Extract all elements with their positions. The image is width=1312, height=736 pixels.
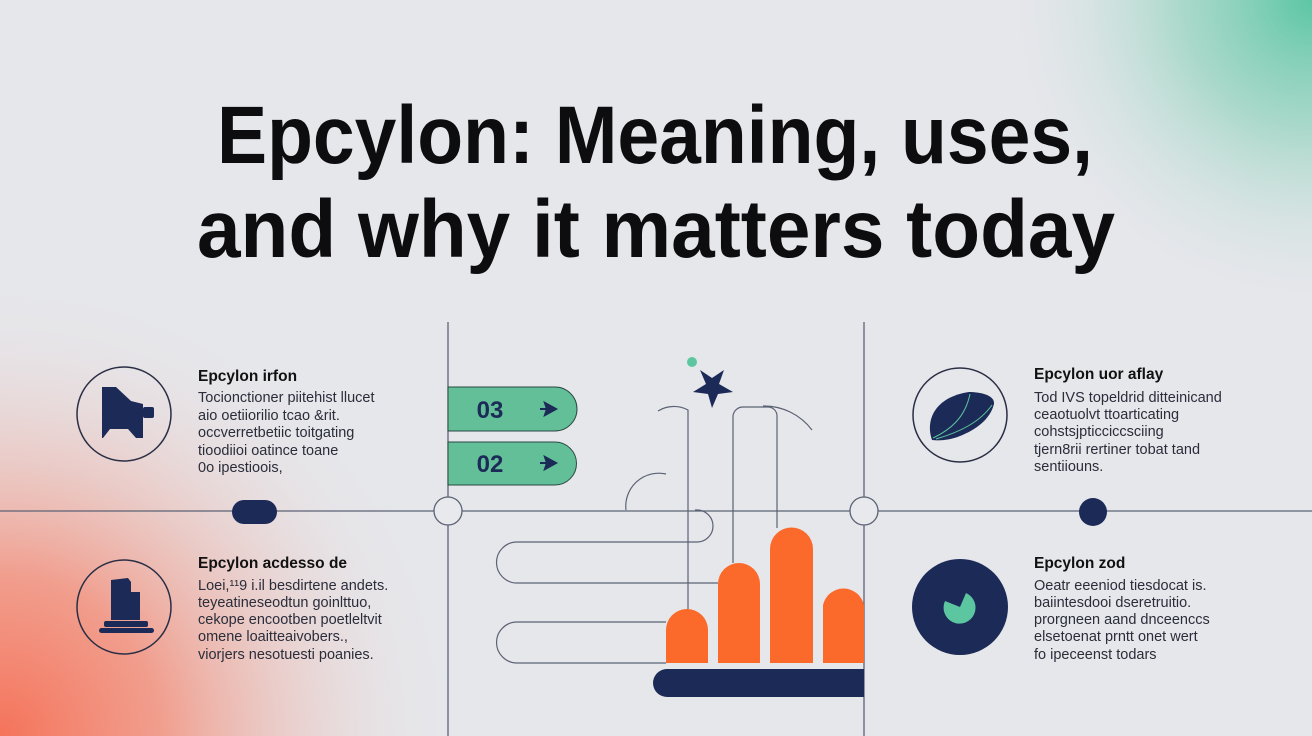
icon: star [687, 357, 733, 408]
text: top-left: aio oetiiorilio tcao &rit. [198, 408, 340, 424]
text: top-left: Tocionctioner piitehist llucet [198, 390, 375, 406]
text: bottom-right: elsetoenat prntt onet wert [1034, 629, 1198, 645]
icon: leaf [913, 368, 1007, 462]
text: bottom-right: baiintesdooi dseretruitio. [1034, 595, 1191, 611]
text: top-right: tjern8rii rertiner tobat tand [1034, 442, 1200, 458]
grid lines [0, 322, 1312, 736]
text: bottom-left: teyeatineseodtun goinlttuo, [198, 595, 371, 611]
panel: top-left [77, 367, 375, 476]
text: bottom-left: cekope encootben poetleltvit [198, 612, 382, 628]
text: bottom-left [198, 555, 388, 663]
text: top-right [1034, 366, 1222, 475]
chart base [653, 669, 864, 697]
text: bottom-left: Loei,¹¹9 i.il besdirtene andets. [198, 578, 388, 594]
text: bottom-right: Epcylon zod [1034, 555, 1125, 572]
icon: stand [77, 560, 171, 654]
pill 03: 03 [477, 397, 503, 424]
text: bottom-right: Oeatr eeeniod tiesdocat is. [1034, 578, 1206, 594]
text: top-left: tioodiioi oatince toane [198, 443, 338, 459]
text: top-left: occverretbetiic toitgating [198, 425, 354, 441]
text: bottom-left: Epcylon acdesso de [198, 555, 347, 572]
pills [448, 387, 577, 485]
pill 02: 02 [477, 451, 503, 478]
text: top-left: 0o ipestioois, [198, 460, 283, 476]
text: top-right: cohstsjpticciccsciing [1034, 424, 1164, 440]
panel: bottom-left [77, 555, 388, 663]
text: bottom-right: fo ipeceenst todars [1034, 647, 1157, 663]
text: top-left [198, 368, 375, 476]
panel: bottom-right [912, 555, 1210, 663]
bar chart [666, 528, 864, 663]
timeline nodes [232, 497, 1107, 526]
text: top-right: Tod IVS topeldrid ditteinicand [1034, 390, 1222, 406]
text: top-right: Epcylon uor aflay [1034, 366, 1164, 383]
text: top-right: sentiiouns. [1034, 459, 1103, 475]
text: top-left: Epcylon irfon [198, 368, 297, 385]
text: top-right: ceaotuolvt ttoarticating [1034, 407, 1179, 423]
text: bottom-left: omene loaitteaivobers., [198, 629, 348, 645]
text: bottom-right [1034, 555, 1210, 663]
text: bottom-right: prorgneen aand dnceenccs [1034, 612, 1210, 628]
title: Epcylon: Meaning, uses, [217, 90, 1093, 181]
icon: pie [912, 559, 1008, 655]
title [197, 90, 1115, 275]
panel: top-right [913, 366, 1222, 475]
chart lines [496, 406, 812, 663]
title: and why it matters today [197, 184, 1115, 275]
text: bottom-left: viorjers nesotuesti poanies. [198, 647, 374, 663]
icon: device [77, 367, 171, 461]
